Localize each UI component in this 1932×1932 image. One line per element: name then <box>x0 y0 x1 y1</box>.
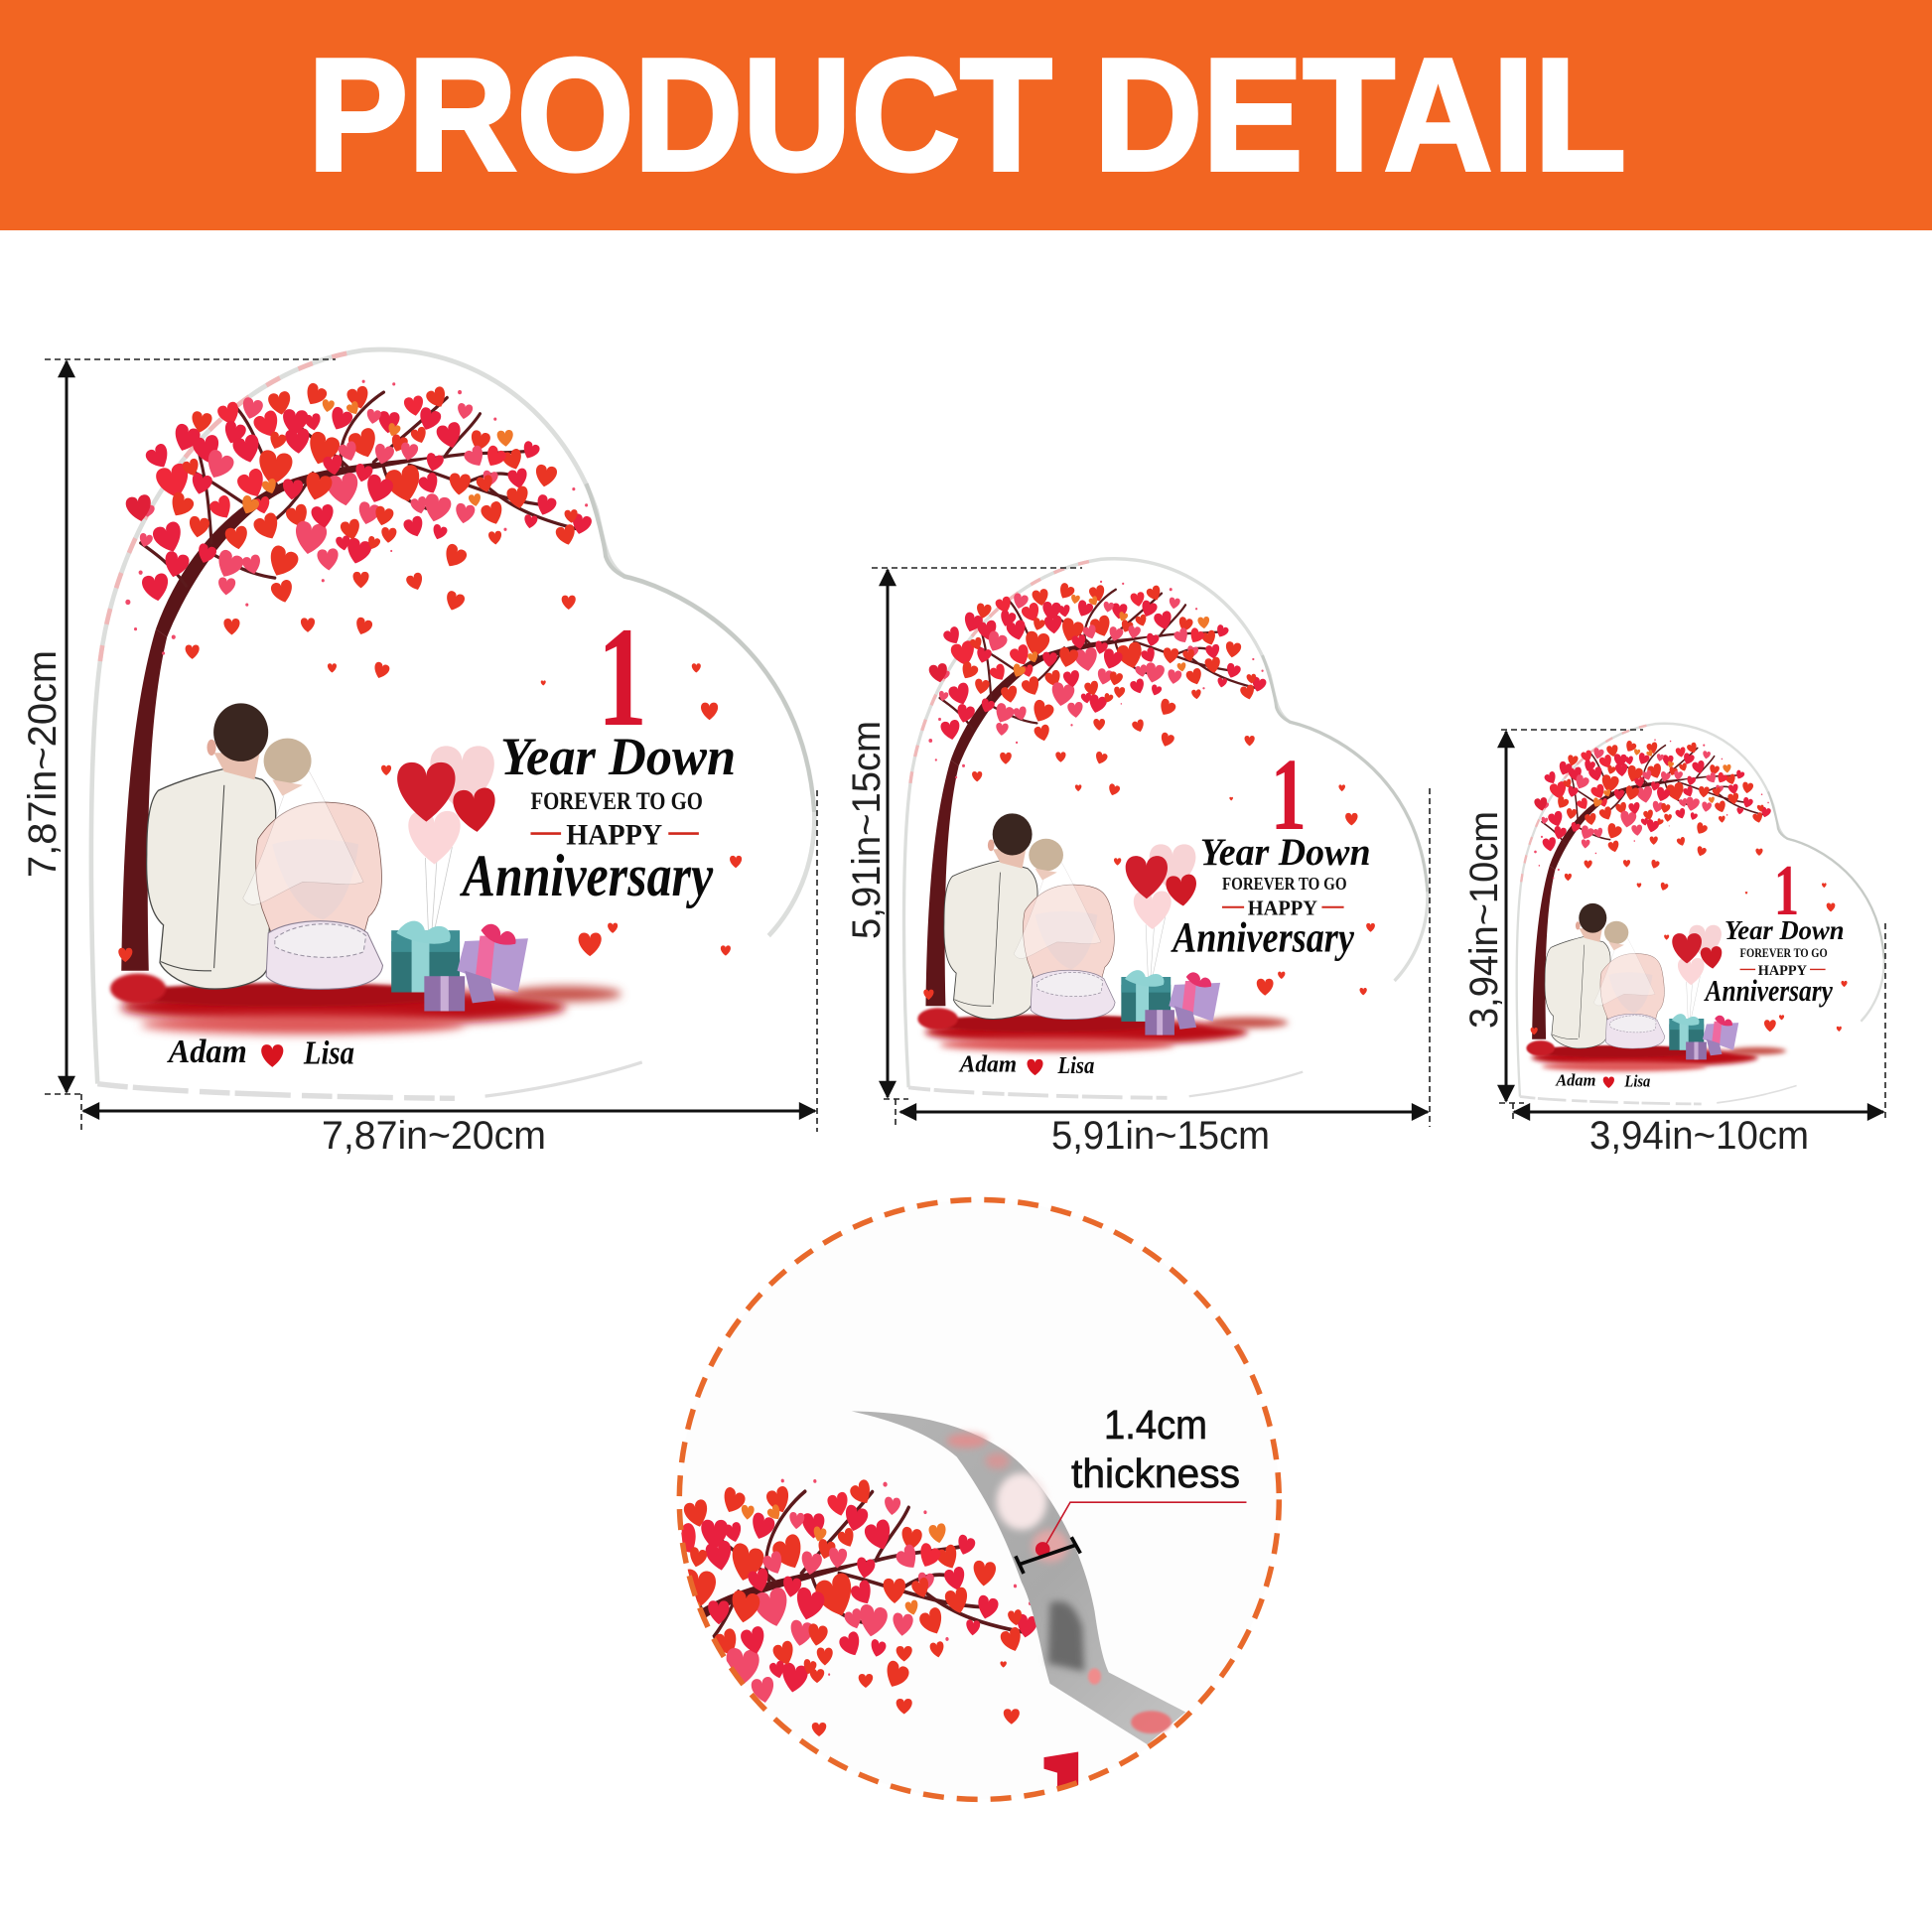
anniversary message: HAPPY <box>1248 897 1317 920</box>
detail circle: thickness close-up <box>677 1197 1283 1803</box>
plaque: large 20cm <box>91 349 814 1098</box>
thickness label <box>1071 1402 1240 1496</box>
zoomed tree branch <box>681 1479 1036 1703</box>
names <box>958 1051 1095 1079</box>
dimensions: large <box>21 359 817 1158</box>
thickness label: 1.4cm <box>1104 1402 1207 1448</box>
dimensions: medium <box>845 568 1430 1158</box>
header banner <box>0 0 1932 230</box>
anniversary message: 1 <box>598 598 647 757</box>
anniversary message: FOREVER TO GO <box>1740 946 1828 960</box>
falling hearts and edge strip <box>810 1411 1246 1789</box>
anniversary message: Anniversary <box>1704 974 1833 1008</box>
width label: 7,87in~20cm <box>322 1114 546 1158</box>
anniversary message: Year Down <box>1200 831 1371 874</box>
number fragment <box>1043 1751 1078 1789</box>
height label: 3,94in~10cm <box>1462 811 1506 1029</box>
names: Adam <box>958 1051 1017 1078</box>
names: Adam <box>167 1034 247 1070</box>
plaque: medium 15cm <box>903 559 1428 1098</box>
names <box>1555 1070 1650 1090</box>
anniversary message: 1 <box>1774 851 1799 930</box>
anniversary message <box>459 598 736 908</box>
title: PRODUCT DETAIL <box>308 26 1626 205</box>
dimensions: small <box>1462 730 1885 1158</box>
names <box>167 1034 354 1072</box>
height label: 5,91in~15cm <box>845 721 889 939</box>
anniversary message <box>1171 738 1371 962</box>
names: Adam <box>1555 1070 1596 1090</box>
anniversary message: FOREVER TO GO <box>530 788 703 815</box>
height label: 7,87in~20cm <box>21 650 65 878</box>
width label: 5,91in~15cm <box>1051 1114 1270 1158</box>
anniversary message <box>1704 851 1845 1008</box>
anniversary message: Anniversary <box>459 841 714 908</box>
names: Lisa <box>1057 1052 1095 1079</box>
anniversary message: HAPPY <box>566 820 662 852</box>
anniversary message: Year Down <box>1725 914 1845 945</box>
anniversary message: HAPPY <box>1758 963 1808 979</box>
acrylic edge strip <box>852 1411 1185 1744</box>
width label: 3,94in~10cm <box>1589 1114 1809 1158</box>
anniversary message: Anniversary <box>1171 914 1355 962</box>
anniversary message: Year Down <box>500 728 736 786</box>
names: Lisa <box>1624 1071 1650 1090</box>
thickness label: thickness <box>1071 1450 1240 1496</box>
dashed circle border <box>679 1199 1279 1799</box>
plaque: small 10cm <box>1517 724 1884 1104</box>
anniversary message: FOREVER TO GO <box>1222 874 1347 894</box>
leader line and measure <box>1016 1502 1246 1574</box>
anniversary message: 1 <box>1271 738 1307 852</box>
names: Lisa <box>303 1035 354 1072</box>
